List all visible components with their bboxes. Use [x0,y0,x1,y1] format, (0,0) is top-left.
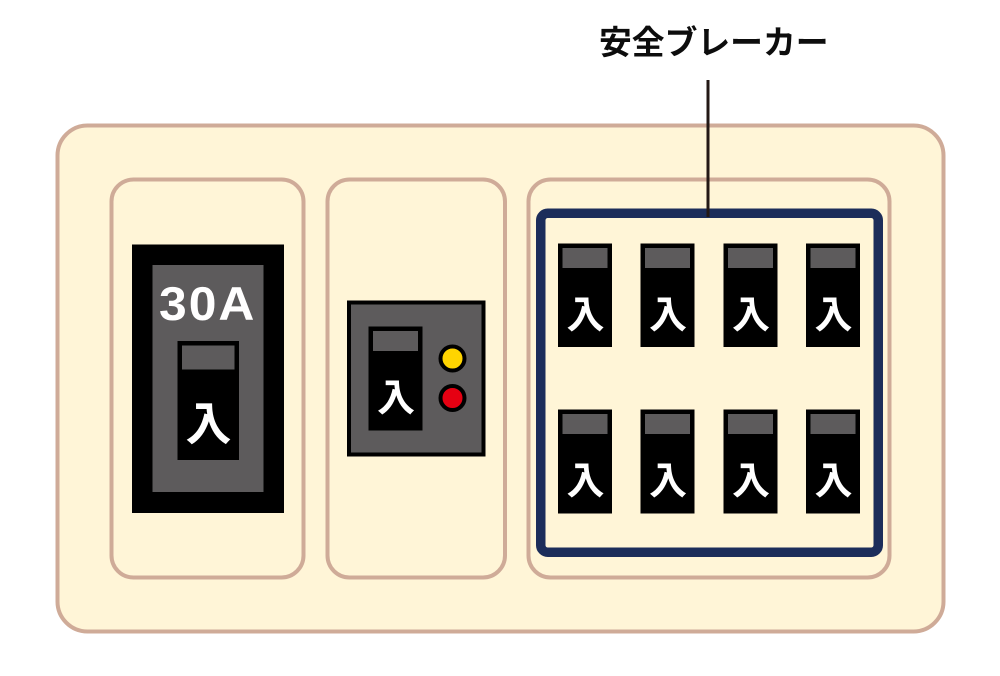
main breaker body [132,244,284,513]
main breaker faceplate [152,265,264,492]
leakage breaker body [349,302,484,454]
panel: earth leakage breaker [328,180,505,578]
board housing [58,126,944,632]
switch row 1: 入 [566,284,605,339]
amperage label 30A: 30A [159,278,254,331]
switch row 2 [558,410,860,514]
panel: branch breakers [528,180,890,578]
label: safety breakers title: 安全ブレーカー [599,17,829,64]
switch row 1: 入 [649,284,687,339]
safety breaker outline [541,213,878,552]
main switch: 入 [186,388,232,454]
switch row 2: 入 [814,450,853,505]
leader line [706,80,710,217]
yellow indicator lamp [440,346,464,370]
red indicator lamp [440,386,464,410]
leakage switch: 入 [377,367,415,422]
switch row 1: 入 [814,284,853,339]
switch row 2: 入 [649,450,687,505]
leakage switch [368,326,422,430]
panel: main breaker [112,180,304,578]
switch row 1: 入 [732,284,770,339]
switch row 1 [558,244,860,347]
switch row 2: 入 [566,450,605,505]
main switch [178,341,239,460]
switch row 2: 入 [732,450,770,505]
